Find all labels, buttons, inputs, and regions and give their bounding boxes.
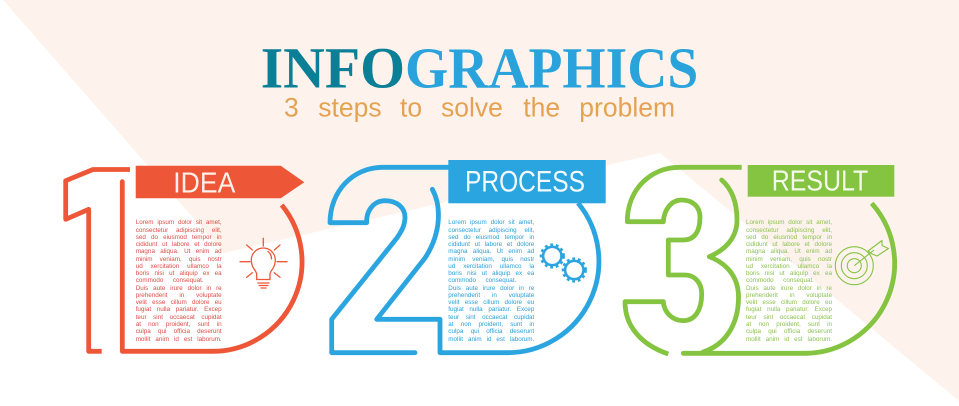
subtitle bbox=[284, 92, 675, 122]
text block: step 2: ud xercitation ullamco la bbox=[448, 263, 534, 270]
text block: step 2: consectetur adipiscing elit, bbox=[448, 227, 534, 234]
icon: gears bbox=[541, 245, 586, 281]
text block: step 1: Duis aute irure dolor in re bbox=[136, 285, 222, 292]
text block: step 2: culpa qui officia deserunt bbox=[448, 328, 534, 335]
subtitle: solve bbox=[441, 92, 503, 122]
text block: step 3 bbox=[746, 219, 832, 343]
subtitle: problem bbox=[579, 92, 675, 122]
banner: result: RESULT bbox=[772, 166, 868, 198]
text block: step 3: velit esse cillum dolore eu bbox=[746, 299, 832, 306]
banner: process: PROCESS bbox=[465, 166, 585, 199]
banner: idea bbox=[136, 166, 304, 200]
text block: step 3: cididunt ut labore et dolore bbox=[746, 241, 832, 248]
text block: step 3: Lorem ipsum dolor sit amet, bbox=[746, 219, 832, 226]
banner: idea: IDEA bbox=[173, 168, 236, 200]
subtitle: the bbox=[523, 92, 560, 122]
text block: step 1: prehenderit in voluptate bbox=[136, 292, 222, 299]
text block: step 3: at non proident, sunt in bbox=[746, 321, 832, 328]
text block: step 1: commodo consequat. bbox=[136, 277, 204, 284]
text block: step 1: Lorem ipsum dolor sit amet, bbox=[136, 219, 222, 226]
text block: step 3: ud xercitation ullamco la bbox=[746, 263, 832, 270]
text block: step 3: fugiat nulla pariatur. Excep bbox=[746, 306, 832, 313]
numeral 3 outline bbox=[625, 167, 895, 354]
text block: step 3: magna aliqua. Ut enim ad bbox=[746, 248, 832, 255]
text block: step 1: ud xercitation ullamco la bbox=[136, 263, 222, 270]
text block: step 3: consectetur adipiscing elit, bbox=[746, 227, 832, 234]
text block: step 1: magna aliqua. Ut enim ad bbox=[136, 248, 222, 255]
text block: step 2: velit esse cillum dolore eu bbox=[448, 299, 534, 306]
text block: step 2: Duis aute irure dolor in re bbox=[448, 285, 534, 292]
text block: step 1 bbox=[136, 219, 222, 343]
text block: step 3: teur sint occaecat cupidat bbox=[746, 314, 832, 321]
text block: step 1: minim veniam, quis nostr bbox=[136, 256, 222, 263]
icon: light bulb bbox=[240, 238, 287, 288]
text block: step 2: Lorem ipsum dolor sit amet, bbox=[448, 219, 534, 226]
title: GRAPHICS bbox=[405, 35, 698, 100]
text block: step 1: boris nisi ut aliquip ex ea bbox=[136, 270, 222, 277]
text block: step 3: mollit anim id est laborum. bbox=[746, 336, 832, 343]
text block: step 3: boris nisi ut aliquip ex ea bbox=[746, 270, 832, 277]
subtitle: to bbox=[400, 92, 422, 122]
text block: step 2: magna aliqua. Ut enim ad bbox=[448, 248, 534, 255]
icon: target with arrow bbox=[835, 240, 888, 285]
text block: step 2: commodo consequat. bbox=[448, 277, 516, 284]
text block: step 2: boris nisi ut aliquip ex ea bbox=[448, 270, 534, 277]
title: INFO bbox=[261, 35, 405, 100]
text block: step 3: Duis aute irure dolor in re bbox=[746, 285, 832, 292]
numeral 2 outline bbox=[330, 167, 599, 353]
text block: step 2: teur sint occaecat cupidat bbox=[448, 314, 534, 321]
text block: step 1: mollit anim id est laborum. bbox=[136, 336, 222, 343]
text block: step 1: sed do eiusmod tempor in bbox=[136, 234, 222, 241]
subtitle: 3 bbox=[284, 92, 299, 122]
text block: step 3: sed do eiusmod tempor in bbox=[746, 234, 832, 241]
numeral 1 outline bbox=[66, 170, 302, 351]
text block: step 3: prehenderit in voluptate bbox=[746, 292, 832, 299]
text block: step 1: culpa qui officia deserunt bbox=[136, 328, 222, 335]
text block: step 2: fugiat nulla pariatur. Excep bbox=[448, 306, 534, 313]
text block: step 3: commodo consequat. bbox=[746, 277, 814, 284]
title bbox=[261, 35, 698, 100]
text block: step 2: cididunt ut labore et dolore bbox=[448, 241, 534, 248]
text block: step 2: mollit anim id est laborum. bbox=[448, 336, 534, 343]
text block: step 2 bbox=[448, 219, 534, 343]
text block: step 3: culpa qui officia deserunt bbox=[746, 328, 832, 335]
text block: step 3: minim veniam, quis nostr bbox=[746, 256, 832, 263]
text block: step 2: sed do eiusmod tempor in bbox=[448, 234, 534, 241]
banner: process bbox=[448, 160, 606, 203]
text block: step 1: consectetur adipiscing elit, bbox=[136, 227, 222, 234]
text block: step 1: cididunt ut labore et dolore bbox=[136, 241, 222, 248]
text block: step 1: at non proident, sunt in bbox=[136, 321, 222, 328]
subtitle: steps bbox=[318, 92, 382, 122]
text block: step 1: fugiat nulla pariatur. Excep bbox=[136, 306, 222, 313]
text block: step 1: teur sint occaecat cupidat bbox=[136, 314, 222, 321]
text block: step 2: prehenderit in voluptate bbox=[448, 292, 534, 299]
text block: step 2: at non proident, sunt in bbox=[448, 321, 534, 328]
text block: step 1: velit esse cillum dolore eu bbox=[136, 299, 222, 306]
text block: step 2: minim veniam, quis nostr bbox=[448, 256, 534, 263]
